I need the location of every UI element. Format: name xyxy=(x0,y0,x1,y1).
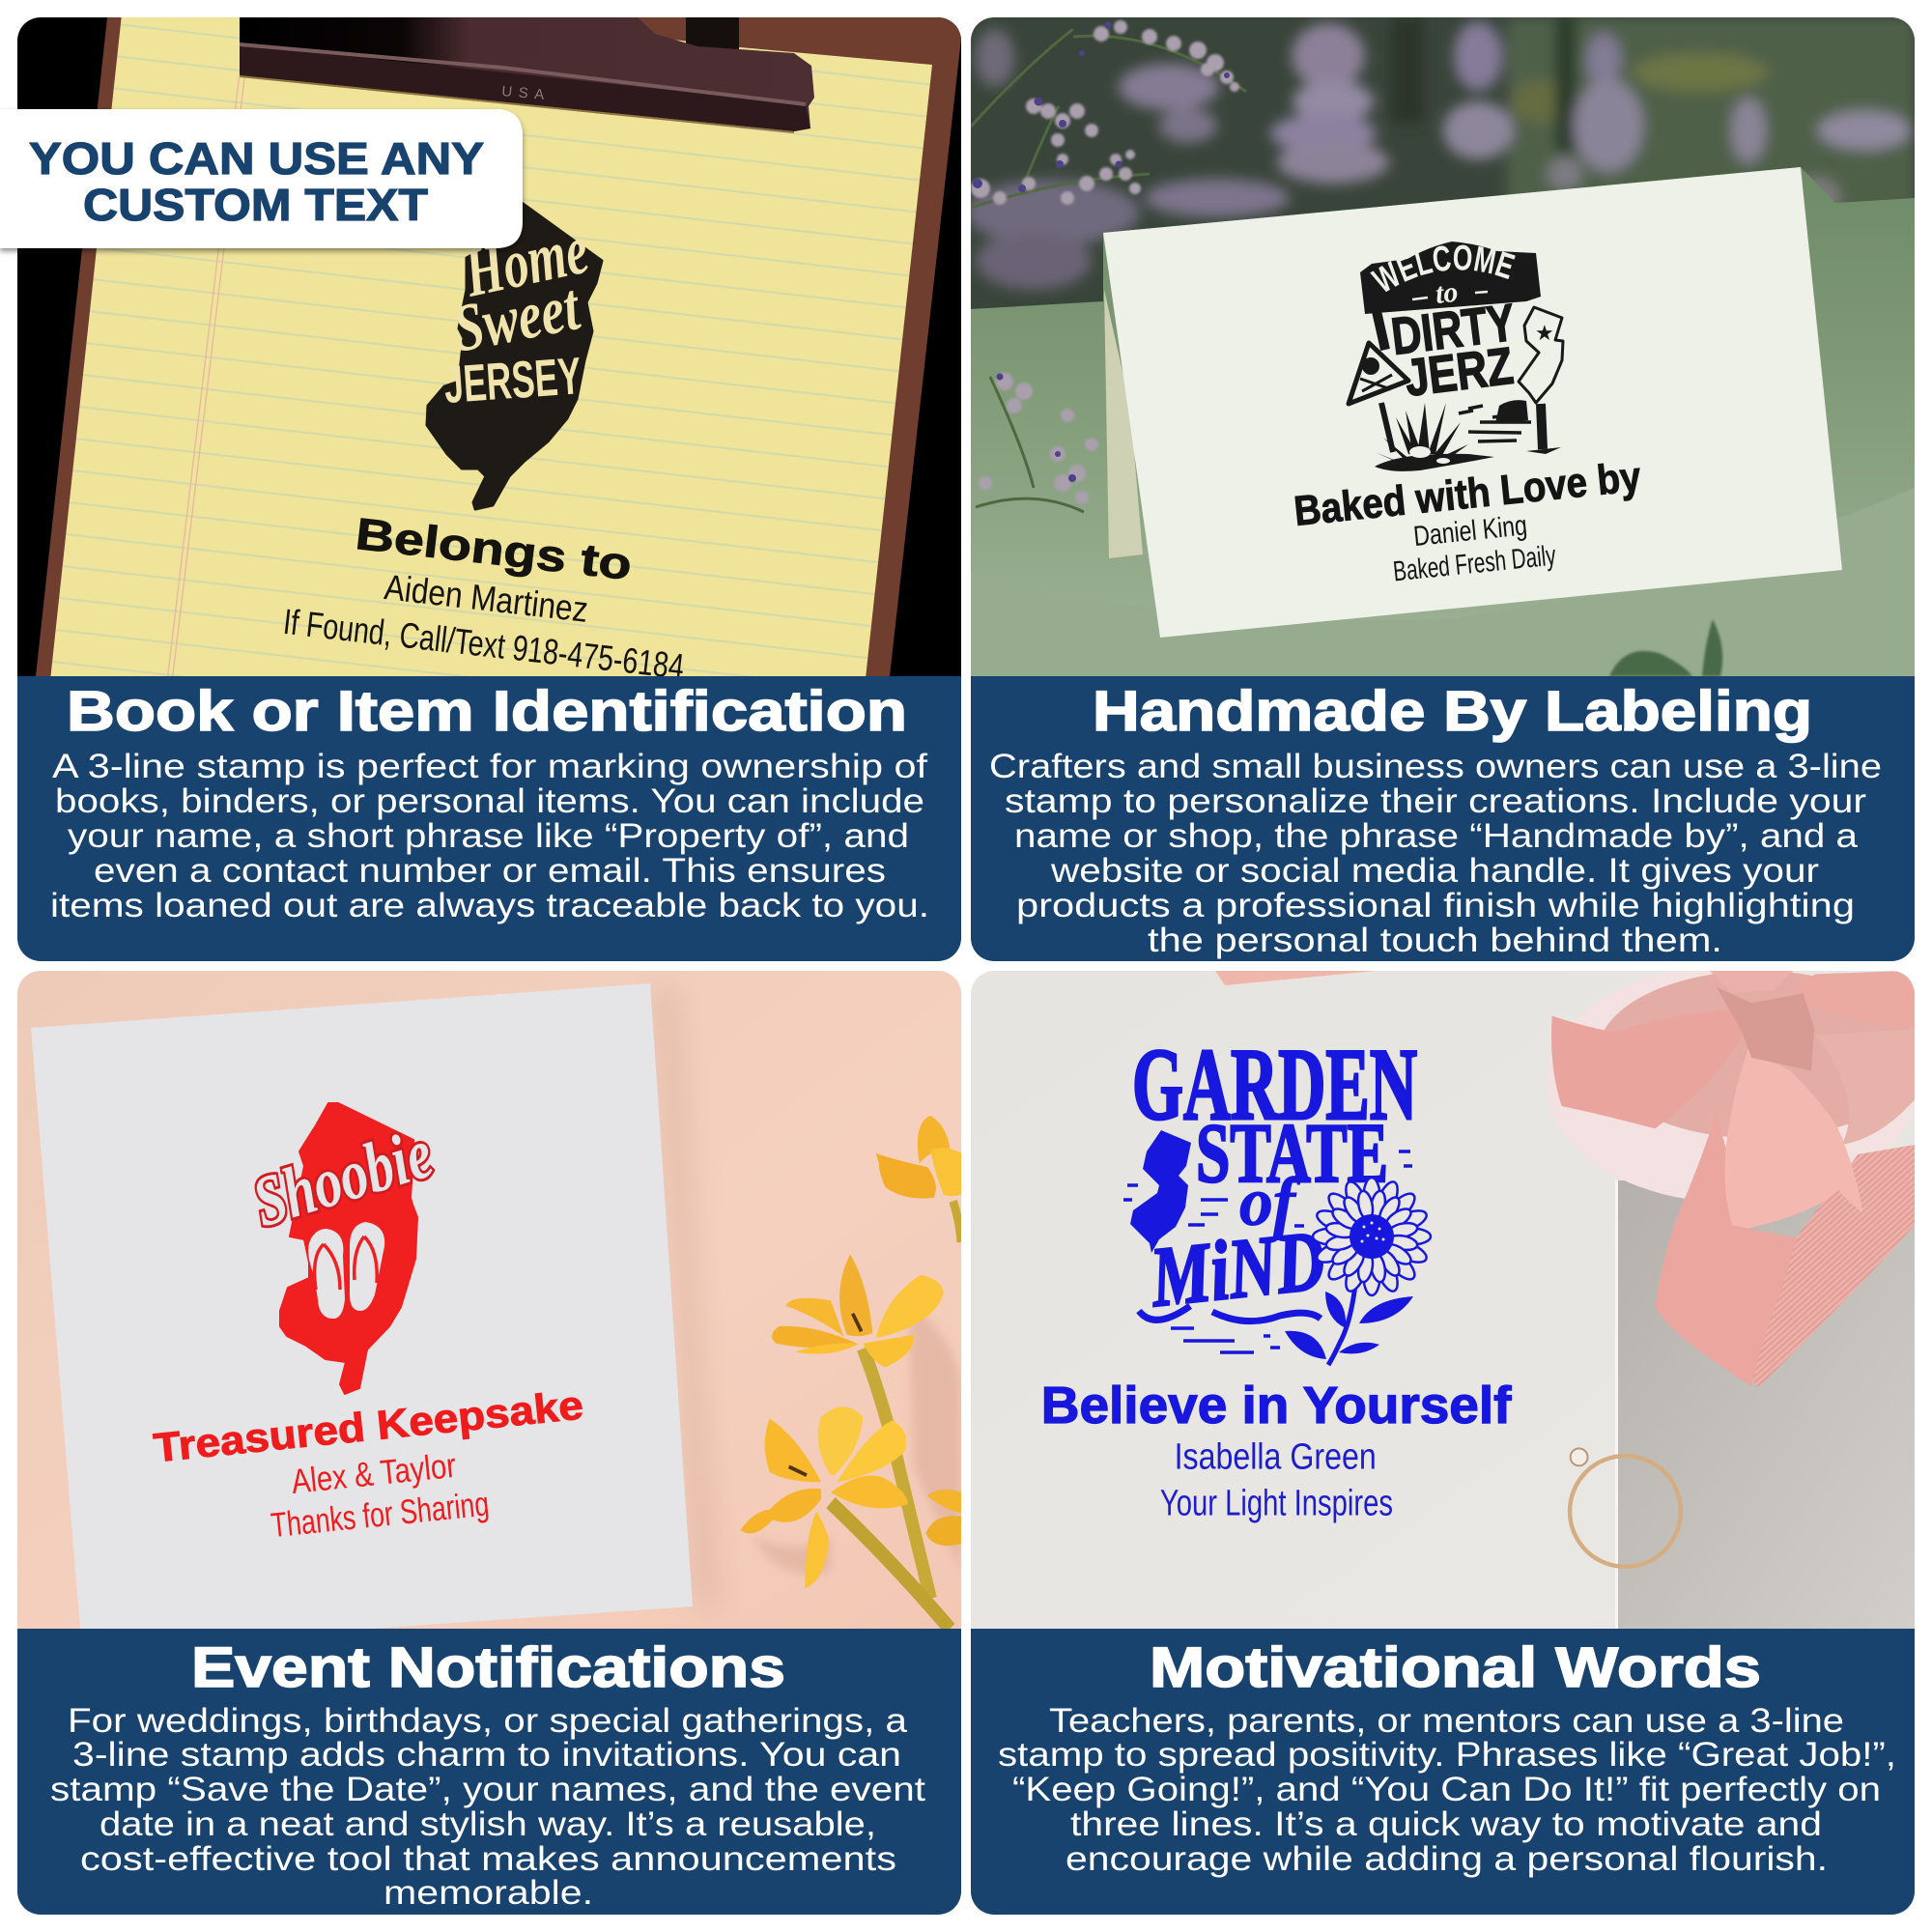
stamp: New Jersey silhouette with Home Sweet Jersey xyxy=(427,203,602,509)
stamp text lines: Your Light Inspires xyxy=(1160,1482,1393,1523)
green fabric xyxy=(971,167,1915,620)
description: items loaned out are always traceable back to you. xyxy=(50,886,929,924)
description: memorable. xyxy=(384,1873,593,1912)
stamp text lines xyxy=(1294,464,1640,582)
stamp text lines xyxy=(1041,1378,1512,1523)
description xyxy=(989,747,1882,959)
stamp: Garden State of Mind: of xyxy=(1239,1163,1301,1240)
caption band xyxy=(17,1629,961,1915)
description: stamp “Save the Date”, your names, and the event xyxy=(50,1770,925,1808)
card xyxy=(31,983,693,1629)
folded card back xyxy=(1104,290,1143,558)
description xyxy=(998,1701,1896,1878)
description xyxy=(50,747,929,924)
stamp: Garden State of Mind: STATE xyxy=(1196,1107,1388,1201)
description: Teachers, parents, or mentors can use a 3-line xyxy=(1049,1701,1844,1740)
metal clip xyxy=(240,17,814,132)
card xyxy=(1103,167,1842,638)
stamp: Welcome to Dirty Jerz sign: WELCOME xyxy=(1370,245,1516,292)
description xyxy=(50,1701,925,1912)
heading: Event Notifications xyxy=(191,1636,785,1699)
panel: book or item identification xyxy=(17,17,961,961)
stamp: Welcome to Dirty Jerz sign: ★ xyxy=(1535,321,1554,345)
stamp text lines: Baked Fresh Daily xyxy=(1392,539,1557,587)
stamp: New Jersey silhouette with Home Sweet Jersey: JERSEY xyxy=(442,347,582,414)
stamp text lines: Baked with Love by xyxy=(1292,454,1643,535)
callout: custom text badge: CUSTOM TEXT xyxy=(83,180,428,230)
description: your name, a short phrase like “Property of”, and xyxy=(68,816,909,855)
stamp: Welcome to Dirty Jerz sign: JERZ xyxy=(1402,337,1517,408)
description: 3-line stamp adds charm to invitations. You can xyxy=(72,1735,901,1774)
heading: Book or Item Identification xyxy=(67,680,907,743)
stamp text lines: Aiden Martinez xyxy=(383,567,590,630)
metal clip: USA xyxy=(501,83,545,103)
description: name or shop, the phrase “Handmade by”, and a xyxy=(1014,816,1858,855)
heading: Motivational Words xyxy=(1150,1636,1761,1699)
blurred lavender background xyxy=(966,17,1915,290)
stamp: New Jersey silhouette with Home Sweet Jersey: Home xyxy=(457,211,595,312)
gold ring xyxy=(1570,1448,1681,1567)
stamp text lines: Believe in Yourself xyxy=(1041,1378,1512,1435)
description: encourage while adding a personal flourish. xyxy=(1065,1839,1828,1878)
photo: tent card on green fabric with lavender xyxy=(971,17,1915,676)
description: stamp to spread positivity. Phrases like “Great Job!”, xyxy=(998,1735,1896,1774)
description: products a professional finish while highlighting xyxy=(1016,886,1855,924)
photo: clipboard with yellow legal pad xyxy=(17,17,961,687)
description: Crafters and small business owners can use a 3-line xyxy=(989,747,1882,785)
caption band xyxy=(971,1629,1915,1915)
description: website or social media handle. It gives your xyxy=(1050,851,1819,890)
description: For weddings, birthdays, or special gatherings, a xyxy=(68,1701,907,1740)
description: A 3-line stamp is perfect for marking ownership of xyxy=(52,747,927,785)
description: books, binders, or personal items. You can include xyxy=(55,781,924,820)
stamp: red New Jersey with Shoobie xyxy=(244,1103,441,1394)
stamp text lines: Isabella Green xyxy=(1175,1435,1377,1477)
stamp: Welcome to Dirty Jerz sign xyxy=(1347,242,1565,471)
stamp: Garden State of Mind: MiND xyxy=(1145,1214,1329,1325)
description: cost-effective tool that makes announcements xyxy=(80,1839,896,1878)
caption band xyxy=(17,676,961,961)
sunflower xyxy=(1285,1178,1431,1365)
stamp text lines: Thanks for Sharing xyxy=(270,1485,491,1545)
photo: paper with pink ribbon and gold ring xyxy=(971,964,1919,1637)
stamp text lines: Alex & Taylor xyxy=(290,1446,458,1501)
stamp: Welcome to Dirty Jerz sign: DIRTY xyxy=(1388,294,1519,366)
stamp: red New Jersey with Shoobie: Shoobie xyxy=(244,1114,441,1242)
description: date in a neat and stylish way. It’s a reusable, xyxy=(99,1804,876,1843)
white disc and pink ribbon xyxy=(1547,964,1919,1388)
heading: Handmade By Labeling xyxy=(1093,680,1812,743)
stamp: Welcome to Dirty Jerz sign: to xyxy=(1434,276,1460,310)
panel: motivational words xyxy=(971,964,1919,1915)
caption band xyxy=(971,676,1915,961)
stamp text lines xyxy=(153,1393,583,1536)
description: even a contact number or email. This ensures xyxy=(94,851,886,890)
photo: white card on peach with yellow flowers xyxy=(17,971,961,1637)
stamp text lines: Belongs to xyxy=(354,508,635,589)
stamp: New Jersey silhouette with Home Sweet Jersey: Sweet xyxy=(447,270,587,367)
stamp text lines: If Found, Call/Text 918-475-6184 xyxy=(281,602,686,687)
stamp text lines xyxy=(284,518,683,676)
description: three lines. It’s a quick way to motivate and xyxy=(1070,1804,1822,1843)
panel: event notifications xyxy=(17,971,961,1915)
callout: custom text badge xyxy=(0,109,523,248)
description: “Keep Going!”, and “You Can Do It!” fit perfectly on xyxy=(1012,1770,1881,1808)
panel: handmade by labeling xyxy=(971,17,1915,961)
description: stamp to personalize their creations. Include your xyxy=(1005,781,1866,820)
stamp: Garden State of Mind: GARDEN xyxy=(1132,1028,1417,1141)
yellow flowers xyxy=(741,1116,961,1629)
stamp text lines: Daniel King xyxy=(1412,509,1528,553)
sharp lavender sprigs xyxy=(971,20,1246,512)
stamp: Garden State of Mind xyxy=(1123,1028,1431,1365)
callout: custom text badge: YOU CAN USE ANY xyxy=(29,133,484,184)
description: the personal touch behind them. xyxy=(1148,921,1722,959)
stamp text lines: Treasured Keepsake xyxy=(152,1382,585,1470)
